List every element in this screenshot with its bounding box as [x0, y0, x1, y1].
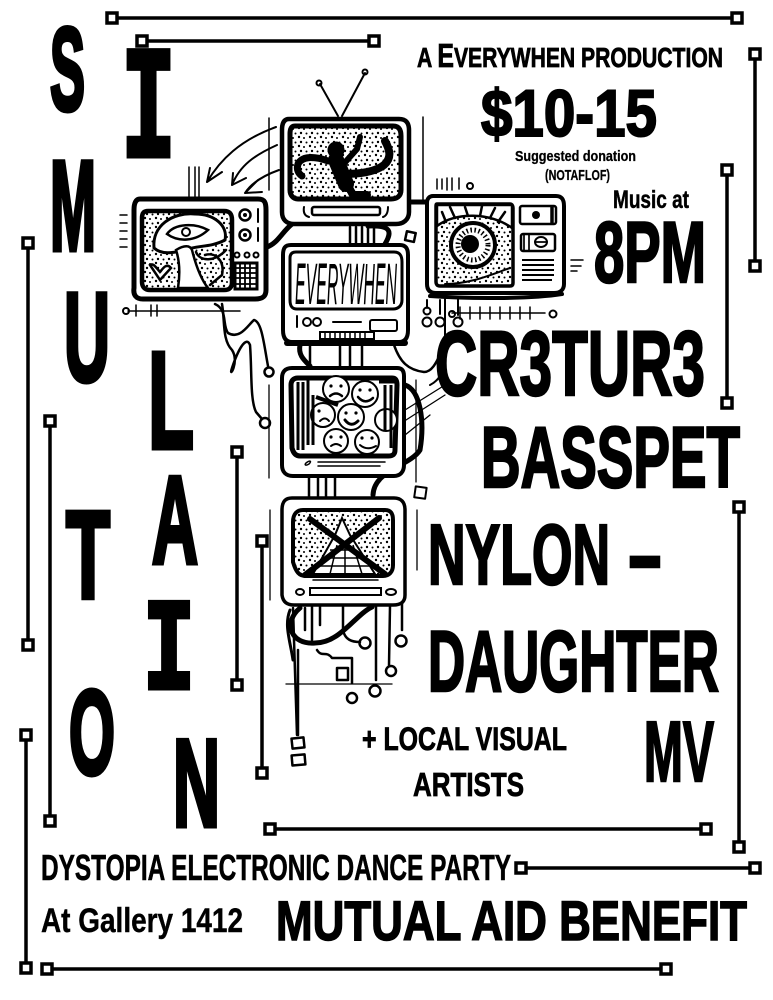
title: SIMULATION: L [148, 324, 194, 478]
text: 8PM [594, 205, 706, 301]
title: SIMULATION: I [121, 24, 176, 205]
lineup [428, 313, 740, 800]
title: SIMULATION: A [152, 452, 198, 590]
title: SIMULATION: N [173, 715, 220, 853]
title: SIMULATION: T [66, 487, 110, 625]
TV: crossed pyramid [282, 498, 405, 605]
title: SIMULATION: S [50, 4, 85, 136]
text: EVERYWHEN [295, 252, 397, 317]
illustration wires and arrows [120, 70, 583, 766]
TV: Everywhen logo [283, 245, 408, 343]
donation note: (NOTAFLOF) [545, 167, 610, 184]
footer text: DYSTOPIA ELECTRONIC DANCE PARTY [41, 847, 511, 888]
title: SIMULATION [50, 4, 220, 853]
TV: mushroom with eye [134, 199, 266, 299]
footer text: At Gallery 1412 [41, 902, 243, 940]
donation note: Suggested donation [515, 148, 636, 165]
TV controls [240, 210, 250, 220]
lineup: NYLON [428, 508, 610, 603]
music time: Music at [613, 186, 690, 214]
TV: giant eye [427, 196, 564, 298]
lineup: - [627, 508, 663, 603]
title: SIMULATION: M [50, 135, 96, 278]
footer text [41, 847, 747, 952]
figure silhouette [297, 137, 389, 195]
local artists [362, 721, 567, 803]
donation note [515, 148, 636, 184]
TV buttons [520, 206, 556, 224]
title: SIMULATION: I [143, 581, 195, 728]
local artists: + LOCAL VISUAL [362, 721, 567, 757]
lineup: MV [644, 705, 714, 800]
price: $10-15 [481, 76, 657, 150]
title: SIMULATION: U [64, 267, 110, 408]
local artists: ARTISTS [413, 766, 524, 803]
thick cables [267, 202, 447, 660]
TV: dancing figure [282, 119, 409, 224]
title: SIMULATION: O [69, 666, 115, 800]
TV: faces [282, 368, 404, 476]
